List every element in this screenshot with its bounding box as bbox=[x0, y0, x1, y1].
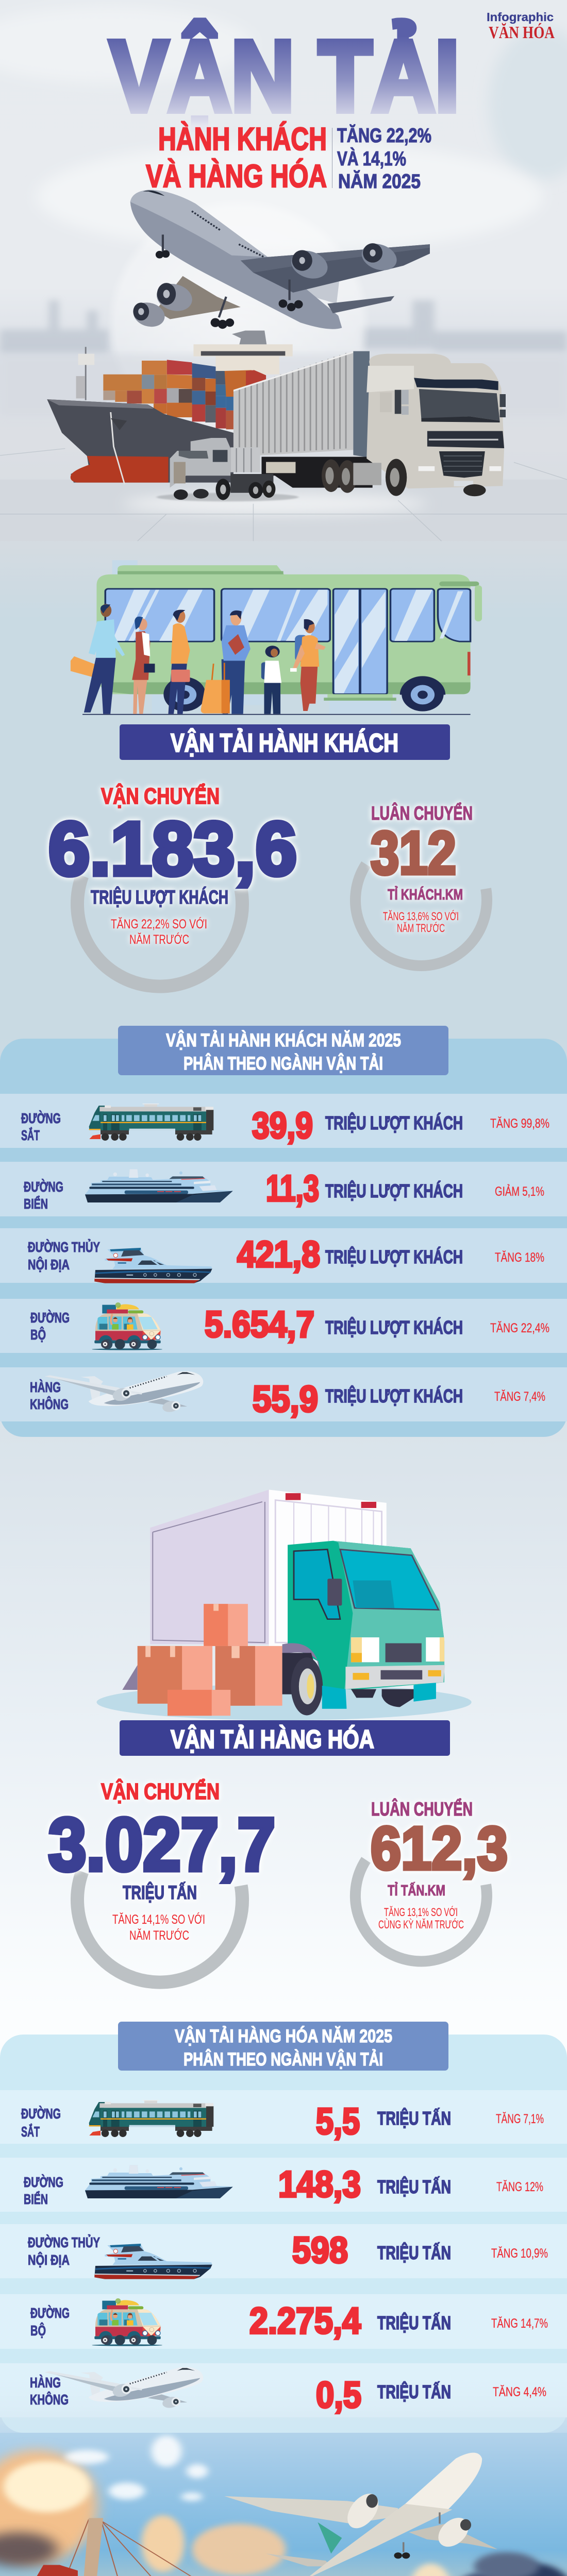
change note bbox=[111, 917, 207, 947]
row: road: TRIỆU LƯỢT KHÁCH bbox=[325, 1316, 463, 1338]
row: aviation: HÀNG bbox=[30, 1379, 61, 1395]
panel: freight transport by sector bbox=[0, 2022, 567, 2433]
ground tiles bbox=[0, 449, 567, 541]
row: inland waterway bbox=[0, 2224, 567, 2279]
row: sea: ĐƯỜNG bbox=[24, 2174, 63, 2190]
panel: header hero illustration bbox=[0, 7, 567, 541]
crane bbox=[11, 2518, 273, 2576]
small tractor truck bbox=[157, 438, 298, 501]
row: rail: TĂNG 99,8% bbox=[490, 1116, 549, 1131]
ring bbox=[355, 1860, 487, 1961]
panel: bottom photo of port, ship and plane bbox=[0, 2370, 567, 2576]
row: rail bbox=[0, 1094, 567, 1148]
row: road: ĐƯỜNG bbox=[30, 2305, 70, 2321]
row: road: BỘ bbox=[30, 1326, 46, 1343]
row: sea: ĐƯỜNG bbox=[24, 1179, 63, 1195]
panel heading: PHÂN THEO NGÀNH VẬN TẢI bbox=[184, 1053, 383, 1074]
ground ellipse bbox=[96, 1684, 472, 1720]
logo: Infographic Văn Hóa: Infographic bbox=[487, 10, 554, 24]
banner: vận tải hàng hóa: VẬN TẢI HÀNG HÓA bbox=[171, 1725, 374, 1754]
stat: passengers carried bbox=[48, 783, 297, 987]
row: sea: GIẢM 5,1% bbox=[495, 1183, 544, 1199]
row: aviation: TRIỆU TẤN bbox=[377, 2381, 451, 2402]
label: LUÂN CHUYỂN bbox=[371, 802, 473, 824]
bus illustration with passengers bbox=[71, 560, 482, 715]
row: road: BỘ bbox=[30, 2322, 46, 2338]
row: sea: TRIỆU LƯỢT KHÁCH bbox=[325, 1180, 463, 1201]
growth line 1: TĂNG 22,2% bbox=[337, 124, 431, 147]
row: sea: TĂNG 12% bbox=[496, 2179, 543, 2194]
row: aviation: TĂNG 4,4% bbox=[493, 2384, 546, 2399]
row: road: ĐƯỜNG bbox=[30, 1310, 70, 1326]
passenger 4 with suitcase bbox=[201, 611, 251, 714]
change note: TĂNG 13,1% SO VỚI bbox=[384, 1906, 458, 1919]
bus body bbox=[96, 560, 482, 714]
row: sea: BIỂN bbox=[24, 2191, 48, 2207]
passenger 6 with backpack bbox=[290, 619, 326, 711]
row: aviation: 55,9 bbox=[253, 1379, 318, 1420]
number: 612,3 bbox=[371, 1815, 508, 1883]
stat: freight carried bbox=[48, 1778, 275, 1982]
cardboard boxes bbox=[138, 1604, 282, 1716]
unit: TỈ TẤN.KM bbox=[388, 1882, 445, 1899]
logo: Infographic Văn Hóa bbox=[487, 10, 555, 42]
subtitle: và hàng hóa: VÀ HÀNG HÓA bbox=[146, 159, 327, 194]
banner: vận tải hành khách: VẬN TẢI HÀNH KHÁCH bbox=[171, 728, 398, 757]
row: inland waterway bbox=[0, 1228, 567, 1283]
label: LUÂN CHUYỂN bbox=[371, 1798, 473, 1820]
change note: CÙNG KỲ NĂM TRƯỚC bbox=[378, 1918, 464, 1931]
number: 6.183,6 bbox=[48, 807, 297, 891]
change note: NĂM TRƯỚC bbox=[129, 1928, 189, 1943]
change note: NĂM TRƯỚC bbox=[129, 932, 189, 947]
row: inland waterway: NỘI ĐỊA bbox=[28, 1256, 70, 1273]
row: inland waterway: ĐƯỜNG THỦY bbox=[28, 1239, 100, 1255]
row: inland waterway: ĐƯỜNG THỦY bbox=[28, 2234, 100, 2250]
growth line 2: VÀ 14,1% bbox=[337, 147, 406, 170]
passenger 2 bbox=[132, 617, 155, 714]
unit: TRIỆU LƯỢT KHÁCH bbox=[91, 886, 228, 908]
stat: ton-km bbox=[355, 1798, 508, 1961]
row: inland waterway: TRIỆU LƯỢT KHÁCH bbox=[325, 1246, 463, 1267]
clouds bbox=[0, 2436, 567, 2576]
panel heading: VẬN TẢI HÀNH KHÁCH NĂM 2025 bbox=[166, 1030, 401, 1050]
change note bbox=[378, 1906, 464, 1931]
row: sea: TRIỆU TẤN bbox=[377, 2176, 451, 2197]
row: aviation bbox=[0, 2363, 567, 2433]
row: sea: 148,3 bbox=[278, 2164, 361, 2205]
row: rail: ĐƯỜNG bbox=[21, 2106, 61, 2122]
row: inland waterway: TĂNG 10,9% bbox=[491, 2246, 548, 2261]
row: rail: ĐƯỜNG bbox=[21, 1110, 61, 1126]
row: rail: TRIỆU TẤN bbox=[377, 2107, 451, 2129]
passenger 3 bbox=[168, 610, 190, 714]
row: rail: SẮT bbox=[21, 2124, 40, 2140]
row: road: 2.275,4 bbox=[249, 2301, 361, 2342]
change note: TĂNG 14,1% SO VỚI bbox=[112, 1912, 205, 1927]
row: rail: SẮT bbox=[21, 1127, 40, 1143]
airplane bbox=[130, 190, 430, 331]
row: aviation: TRIỆU LƯỢT KHÁCH bbox=[325, 1385, 463, 1406]
truck box bbox=[122, 1490, 387, 1690]
banner: vận tải hàng hóa bbox=[120, 1720, 450, 1756]
panel heading: VẬN TẢI HÀNG HÓA NĂM 2025 bbox=[175, 2026, 392, 2046]
row: sea bbox=[0, 2158, 567, 2212]
row: road: 5.654,7 bbox=[205, 1304, 314, 1345]
title: Vận tải: VẬN TẢI bbox=[110, 20, 459, 132]
ring bbox=[77, 876, 242, 987]
row: inland waterway: 598 bbox=[292, 2230, 348, 2271]
bus wheels bbox=[163, 677, 444, 711]
row: inland waterway: TRIỆU TẤN bbox=[377, 2242, 451, 2263]
row: sea: BIỂN bbox=[24, 1196, 48, 1212]
label: VẬN CHUYỂN bbox=[101, 783, 220, 809]
row: aviation bbox=[0, 1367, 567, 1421]
white airplane bbox=[224, 2453, 497, 2576]
truck cab bbox=[282, 1541, 445, 1716]
row: aviation: KHÔNG bbox=[30, 2391, 69, 2408]
cargo truck illustration with boxes bbox=[96, 1490, 472, 1720]
banner: vận tải hành khách bbox=[120, 724, 450, 760]
change note: NĂM TRƯỚC bbox=[397, 922, 445, 935]
panel: passenger transport by sector bbox=[0, 1026, 567, 1437]
row: inland waterway: TĂNG 18% bbox=[495, 1250, 544, 1265]
change note bbox=[383, 910, 459, 935]
row: rail: TRIỆU LƯỢT KHÁCH bbox=[325, 1112, 463, 1133]
panel heading: PHÂN THEO NGÀNH VẬN TẢI bbox=[184, 2049, 383, 2070]
passenger 1 with bag bbox=[71, 604, 125, 714]
row: road bbox=[0, 1299, 567, 1353]
number: 312 bbox=[371, 819, 456, 887]
change note: TĂNG 13,6% SO VỚI bbox=[383, 910, 459, 923]
row: road: TĂNG 14,7% bbox=[491, 2316, 548, 2331]
subtitle: hành khách: HÀNH KHÁCH bbox=[158, 122, 327, 157]
stat: passenger-km bbox=[356, 802, 487, 965]
row: road: TĂNG 22,4% bbox=[490, 1320, 549, 1335]
label: VẬN CHUYỂN bbox=[101, 1778, 220, 1804]
row: aviation: KHÔNG bbox=[30, 1396, 69, 1412]
foggy sky and city skyline bbox=[0, 7, 567, 541]
child passenger bbox=[261, 646, 281, 714]
row: inland waterway: 421,8 bbox=[237, 1234, 320, 1275]
row: rail bbox=[0, 2090, 567, 2144]
row: sea bbox=[0, 1162, 567, 1216]
row: rail: TĂNG 7,1% bbox=[496, 2111, 544, 2126]
row: inland waterway: NỘI ĐỊA bbox=[28, 2251, 70, 2268]
row: rail: 39,9 bbox=[252, 1106, 313, 1146]
row: aviation: TĂNG 7,4% bbox=[494, 1389, 545, 1404]
panel heading bbox=[118, 1026, 448, 1075]
cargo ship with containers bbox=[47, 331, 293, 484]
change note: TĂNG 22,2% SO VỚI bbox=[111, 917, 207, 931]
sky bbox=[0, 2370, 567, 2576]
unit: TRIỆU TẤN bbox=[123, 1882, 197, 1903]
row: aviation: 0,5 bbox=[316, 2375, 361, 2416]
row: road bbox=[0, 2294, 567, 2349]
row: sea: 11,3 bbox=[266, 1168, 319, 1209]
row: road: TRIỆU TẤN bbox=[377, 2312, 451, 2333]
ring bbox=[356, 865, 487, 965]
unit: TỈ KHÁCH.KM bbox=[388, 886, 463, 903]
ring bbox=[77, 1872, 242, 1982]
growth line 3: NĂM 2025 bbox=[338, 170, 421, 193]
panel heading bbox=[118, 2022, 448, 2071]
row: rail: 5,5 bbox=[316, 2102, 360, 2142]
semi truck bbox=[234, 351, 506, 496]
change note bbox=[112, 1912, 205, 1943]
row: aviation: HÀNG bbox=[30, 2375, 61, 2391]
number: 3.027,7 bbox=[48, 1803, 275, 1886]
